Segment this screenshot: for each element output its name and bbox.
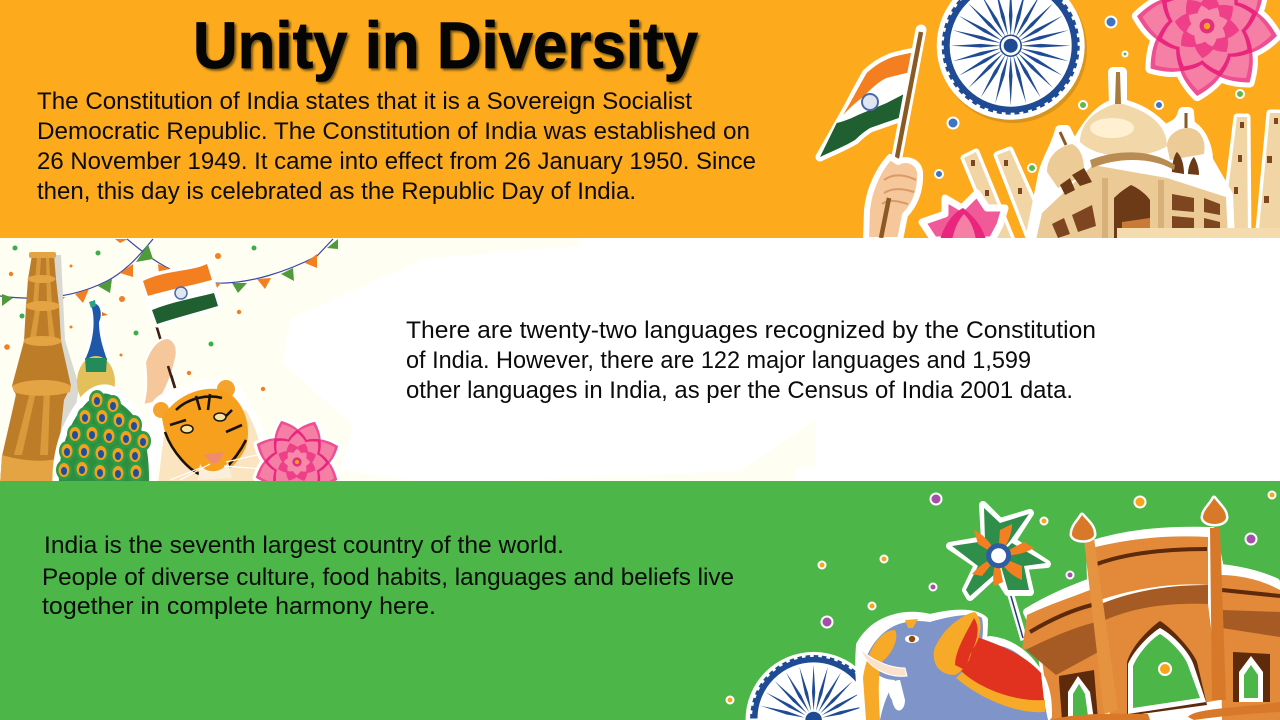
icon: pink flower middle: [252, 418, 341, 481]
arches: [1114, 185, 1150, 240]
icon: ashoka chakra top: [937, 0, 1087, 123]
panel: middle white band: [0, 238, 1280, 481]
text block: languages: other languages in India, as per the Census of India 2001 data.: [406, 377, 1073, 404]
text block: languages: [406, 317, 1096, 404]
icon: pink flower top: [1127, 0, 1280, 106]
icon: bunting: [0, 239, 338, 306]
pillars: [1084, 538, 1118, 714]
platform: [1117, 228, 1280, 238]
icon: qutub minar tower: [0, 252, 79, 485]
base: [1050, 714, 1150, 720]
decorative dots top: [935, 16, 1244, 178]
text block: constitution: The Constitution of India states that it is a Sovereign Socialist: [37, 88, 692, 115]
small arches: [1059, 670, 1098, 720]
text block: constitution: then, this day is celebrated as the Republic Day of India.: [37, 178, 636, 205]
cream sliver at lower middle: [500, 420, 815, 481]
icon: pink lotus top: [922, 193, 1005, 240]
text block: diversity: India is the seventh largest country of the world.: [44, 532, 564, 559]
icon: peacock: [55, 300, 153, 485]
decorative dots bottom: [726, 492, 1276, 704]
panel: green footer band: [0, 481, 1280, 720]
finials: [1072, 498, 1226, 540]
cream background behind middle illustrations: [0, 238, 580, 481]
text block: languages: of India. However, there are 122 major languages and 1,599: [406, 347, 1031, 374]
decorative dots middle: [4, 246, 265, 391]
text block: languages: There are twenty-two languages recognized by the Constitution: [406, 317, 1096, 344]
icon: hand with indian flag top: [820, 30, 921, 240]
white outline: [1030, 72, 1230, 240]
arch opening: [1127, 621, 1207, 716]
body: [1036, 165, 1228, 240]
side domes: [1047, 144, 1084, 188]
icon: pinwheel: [950, 505, 1047, 640]
text block: constitution: [37, 88, 756, 205]
icon: indian flag middle: [143, 264, 218, 405]
text block: diversity: People of diverse culture, food habits, languages and beliefs live: [42, 564, 734, 591]
icon: gateway of india: [1022, 498, 1280, 720]
main dome: [1080, 103, 1167, 156]
icon: tiger face: [152, 380, 275, 485]
icon: ashoka chakra bottom: [746, 652, 882, 720]
icon: taj mahal: [964, 72, 1280, 240]
text block: diversity: together in complete harmony here.: [42, 593, 436, 620]
text block: constitution: 26 November 1949. It came into effect from 26 January 1950. Since: [37, 148, 756, 175]
panel: orange header band: [0, 0, 1280, 238]
title: Unity in Diversity: [193, 8, 698, 82]
text block: diversity: [42, 532, 734, 620]
text block: constitution: Democratic Republic. The Constitution of India was established on: [37, 118, 750, 145]
icon: elephant: [859, 612, 1048, 720]
